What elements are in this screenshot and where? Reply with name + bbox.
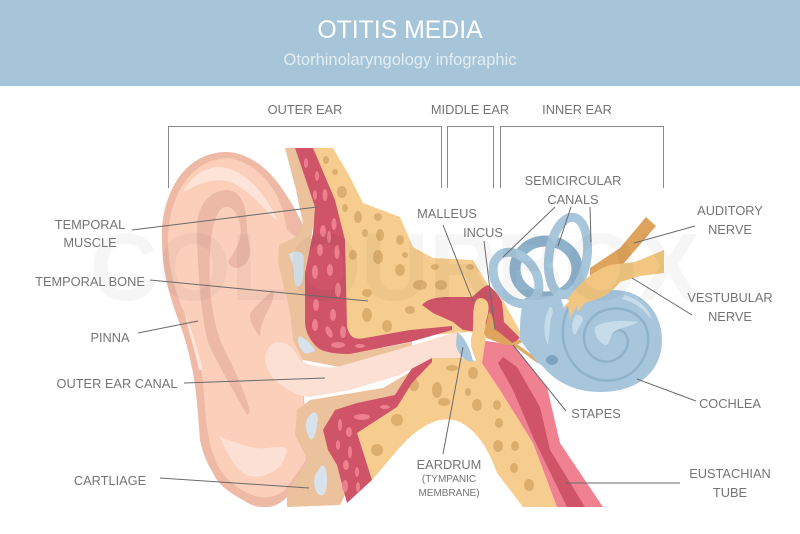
labels: center: EARDRUM (417, 457, 481, 472)
labels: center: (TYMPANIC (422, 474, 476, 485)
labels: right side: TUBE (713, 485, 747, 500)
labels: right side: SEMICIRCULAR (525, 173, 621, 188)
labels: right side: CANALS (547, 192, 599, 207)
section brackets: INNER EAR (542, 102, 612, 117)
labels: right side: NERVE (708, 309, 752, 324)
labels: center: STAPES (571, 406, 621, 421)
eardrum (456, 332, 473, 362)
eustachian tube (480, 340, 603, 507)
header band (0, 0, 800, 86)
labels: center (417, 206, 621, 499)
labels: right side (503, 173, 773, 500)
bone: upper (313, 148, 522, 345)
incus (484, 312, 515, 345)
malleus (471, 298, 489, 364)
section brackets (168, 102, 664, 188)
helix highlight (183, 167, 277, 220)
cochlea spiral (563, 305, 648, 381)
section brackets: OUTER EAR (268, 102, 342, 117)
cochlea highlights (595, 321, 638, 345)
tan tissue strip: upper (278, 148, 412, 367)
labels: center: MEMBRANE) (418, 488, 480, 499)
tan tissue block: lower (287, 372, 410, 507)
labels: left side: TEMPORAL (55, 217, 125, 232)
cochlea (538, 290, 662, 392)
outer ear illustration (162, 152, 312, 507)
labels: left side: TEMPORAL BONE (35, 274, 145, 289)
auditory and vestibular nerves (562, 217, 664, 318)
subtitle: Otorhinolaryngology infographic (284, 51, 516, 69)
labels: left side: CARTLIAGE (74, 473, 146, 488)
middle ear cavity (422, 285, 520, 344)
ossicles (456, 298, 536, 364)
labels: left side: MUSCLE (63, 235, 117, 250)
stapes (514, 334, 536, 360)
cartilage pieces (289, 252, 327, 495)
rim highlight (185, 313, 203, 370)
vestibule (520, 295, 575, 370)
lobe highlight (220, 437, 287, 477)
muscle spots (304, 158, 390, 492)
labels: right side: EUSTACHIAN (689, 466, 771, 481)
ear canal (265, 331, 462, 397)
labels: center: INCUS (463, 225, 503, 240)
inner ear (484, 215, 662, 392)
muscle: upper temporal (295, 148, 452, 354)
title: OTITIS MEDIA (317, 17, 483, 44)
semicircular canals (515, 241, 577, 297)
labels: right side: COCHLEA (699, 396, 761, 411)
labels: right side: AUDITORY (697, 203, 763, 218)
labels: left side (35, 207, 368, 488)
antihelix folds (197, 190, 250, 415)
watermark: COLOURBOX (90, 214, 700, 321)
labels: right side: VESTUBULAR (687, 290, 773, 305)
labels: left side: OUTER EAR CANAL (57, 376, 177, 391)
pinna (162, 152, 312, 507)
muscle: lower (323, 357, 432, 503)
bone: lower arch (357, 357, 557, 507)
labels: left side: PINNA (90, 330, 130, 345)
section brackets: MIDDLE EAR (431, 102, 509, 117)
bone spots (323, 156, 534, 491)
labels: center: MALLEUS (417, 206, 477, 221)
labels: right side: NERVE (708, 222, 752, 237)
